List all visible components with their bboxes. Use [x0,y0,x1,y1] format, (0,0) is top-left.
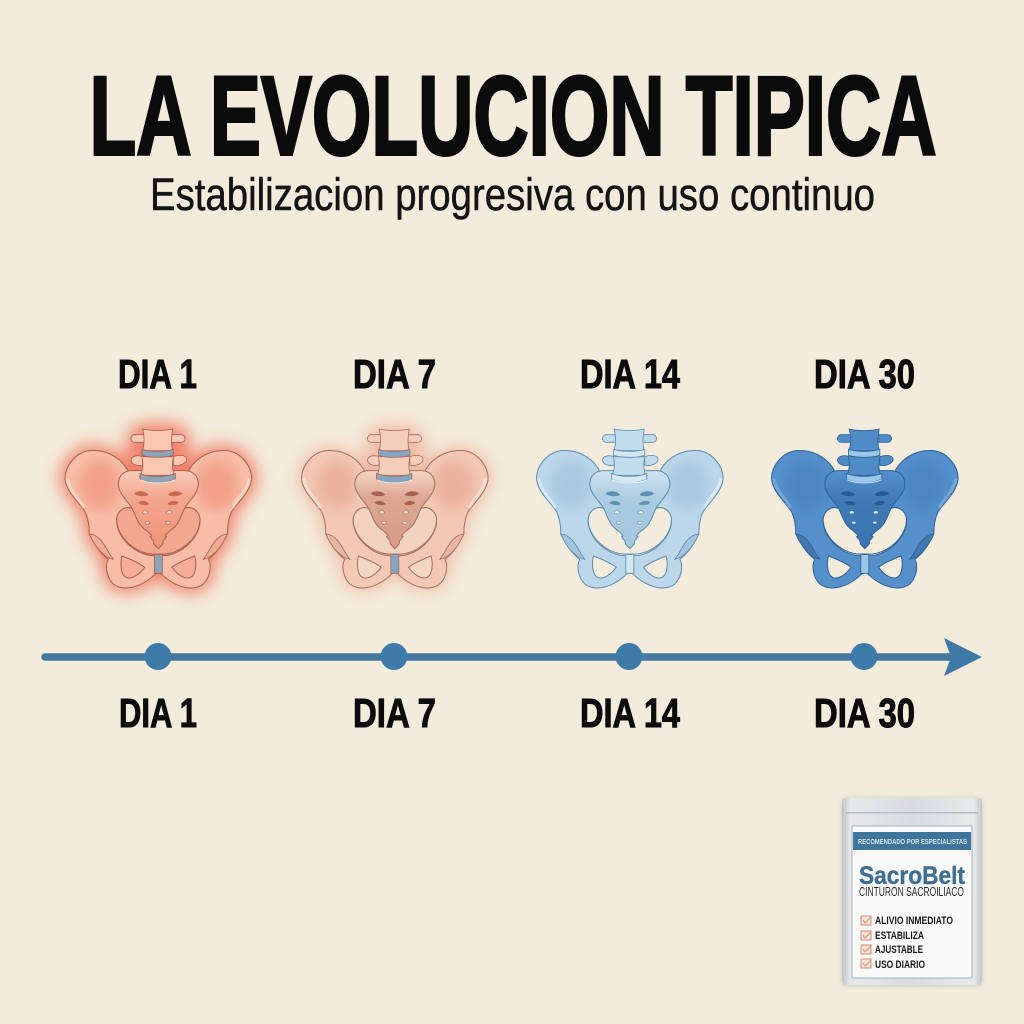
benefits checklist: ALIVIO INMEDIATO [875,915,953,927]
day labels below timeline: DIA 14 [580,690,680,736]
day labels above pelvis illustrations: DIA 14 [580,351,680,397]
pouch header band: RECOMENDADO POR ESPECIALISTAS [858,837,967,846]
day labels above pelvis illustrations: DIA 1 [118,351,197,397]
day labels below timeline: DIA 30 [814,690,915,736]
pelvis day 7: fading red [301,428,488,588]
timeline arrow [45,638,982,676]
day labels below timeline: DIA 7 [353,690,436,736]
brand name: SacroBelt [859,862,966,890]
benefits checklist [861,915,953,971]
benefits checklist: USO DIARIO [875,959,925,971]
subtitle: Estabilizacion progresiva con uso continuo [150,169,875,220]
day labels below timeline [119,690,915,736]
product type: CINTURON SACROILIACO [859,885,964,899]
product pouch: SacroBelt [842,798,982,986]
pelvis day 1: inflamed red [65,428,252,588]
benefits checklist: ESTABILIZA [875,930,924,942]
pelvis day 14: light blue [536,429,723,588]
day labels above pelvis illustrations: DIA 7 [353,351,436,397]
pelvis day 30: deep blue [771,429,958,588]
day labels above pelvis illustrations [118,351,915,397]
day labels below timeline: DIA 1 [119,690,197,736]
day labels above pelvis illustrations: DIA 30 [814,351,915,397]
pouch header band [853,832,971,850]
benefits checklist: AJUSTABLE [875,944,923,956]
